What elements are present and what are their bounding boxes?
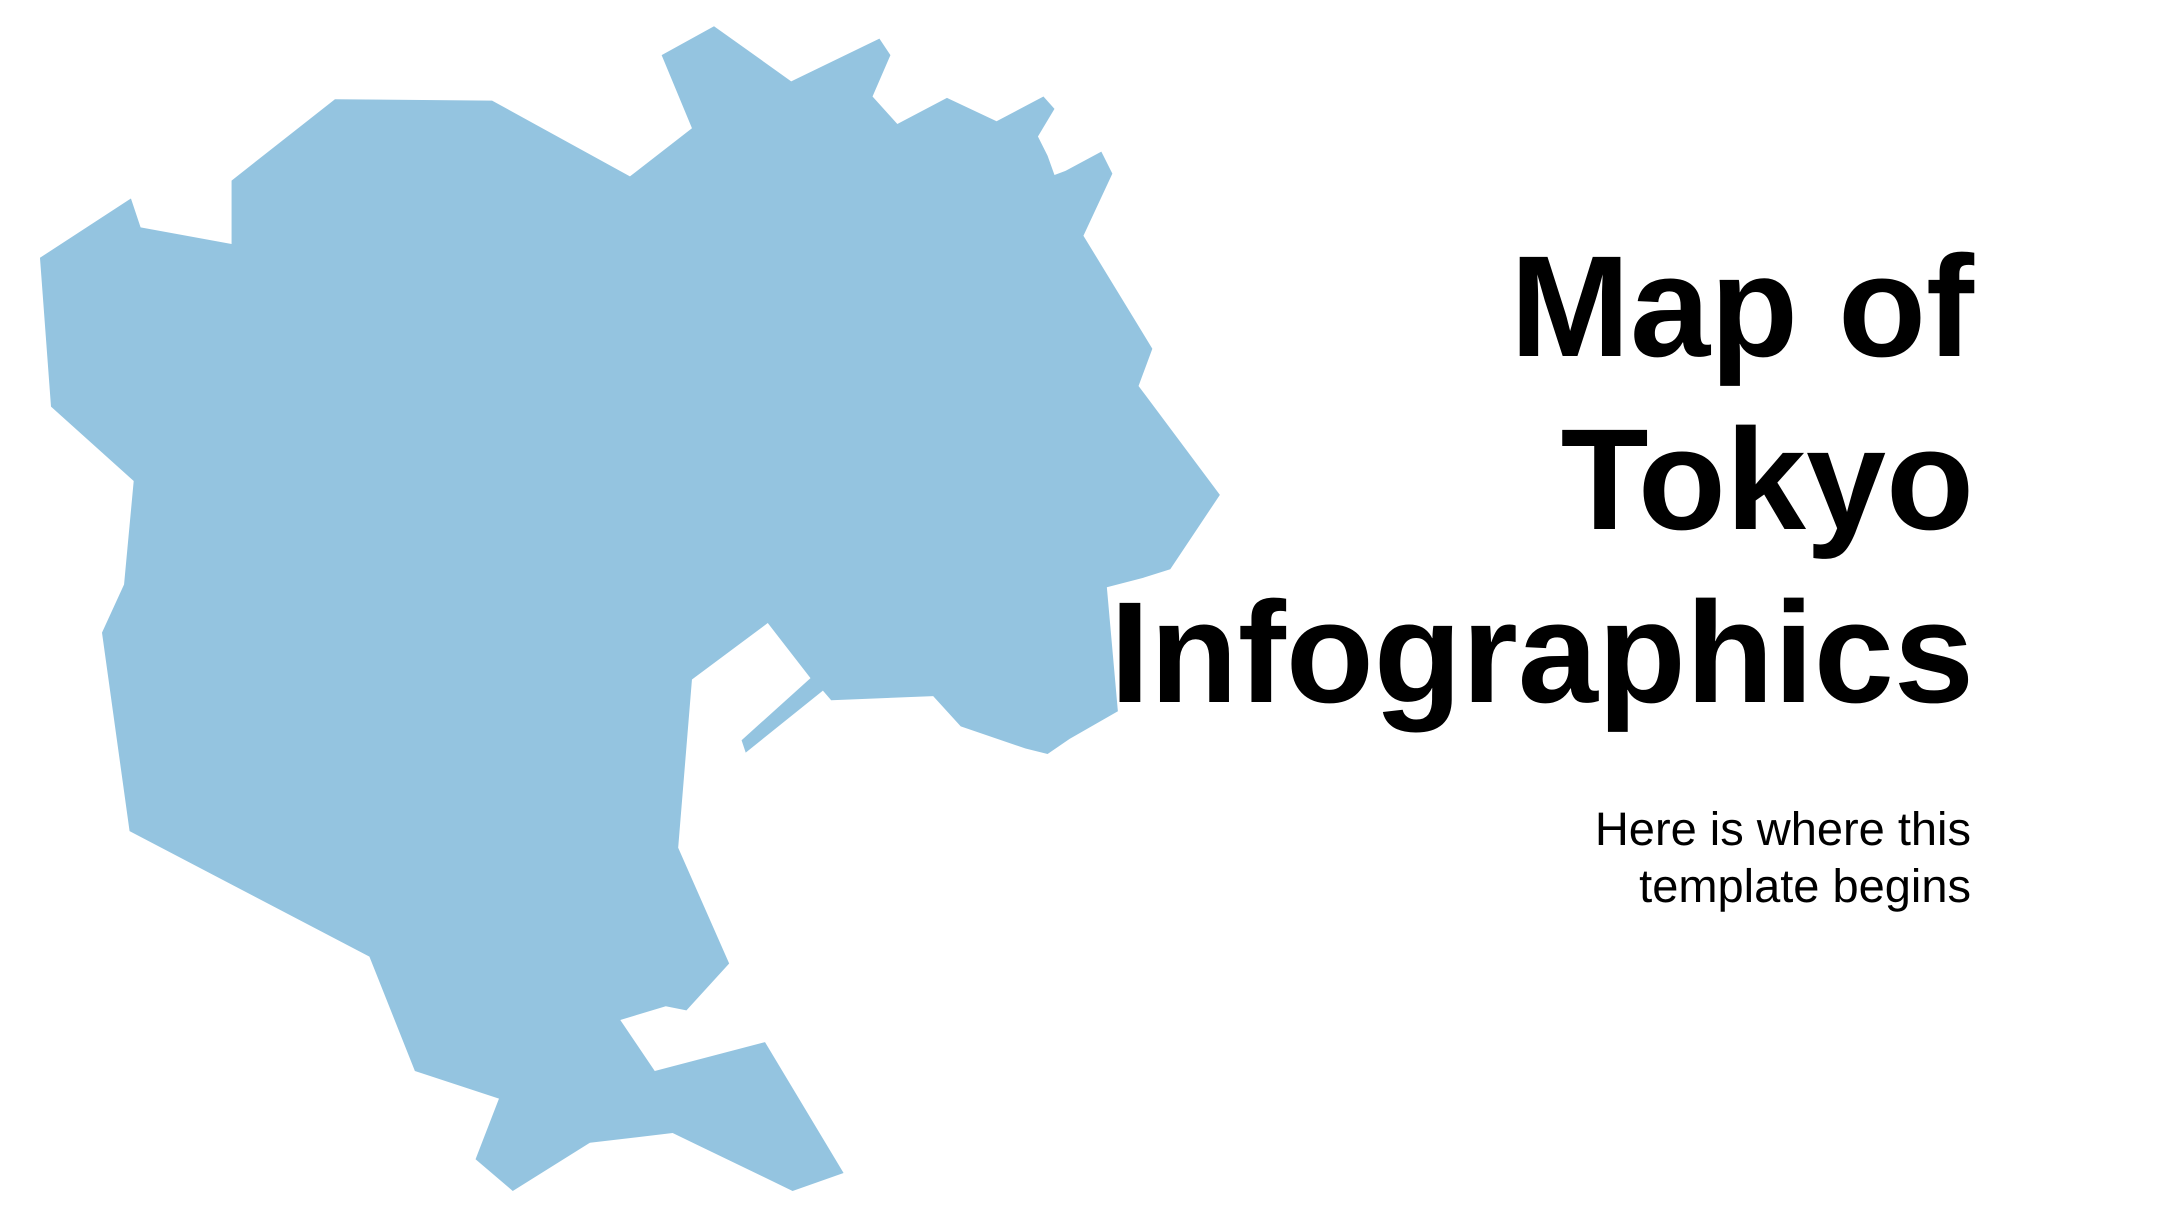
title: Infographics <box>1110 572 1974 733</box>
title: Map of <box>1510 226 1975 387</box>
title: Tokyo <box>1561 399 1974 560</box>
map: Tokyo silhouette <box>40 26 1220 1191</box>
title <box>1110 226 1975 733</box>
subtitle: template begins <box>1639 859 1971 912</box>
subtitle: Here is where this <box>1595 802 1971 855</box>
subtitle <box>1595 802 1971 912</box>
